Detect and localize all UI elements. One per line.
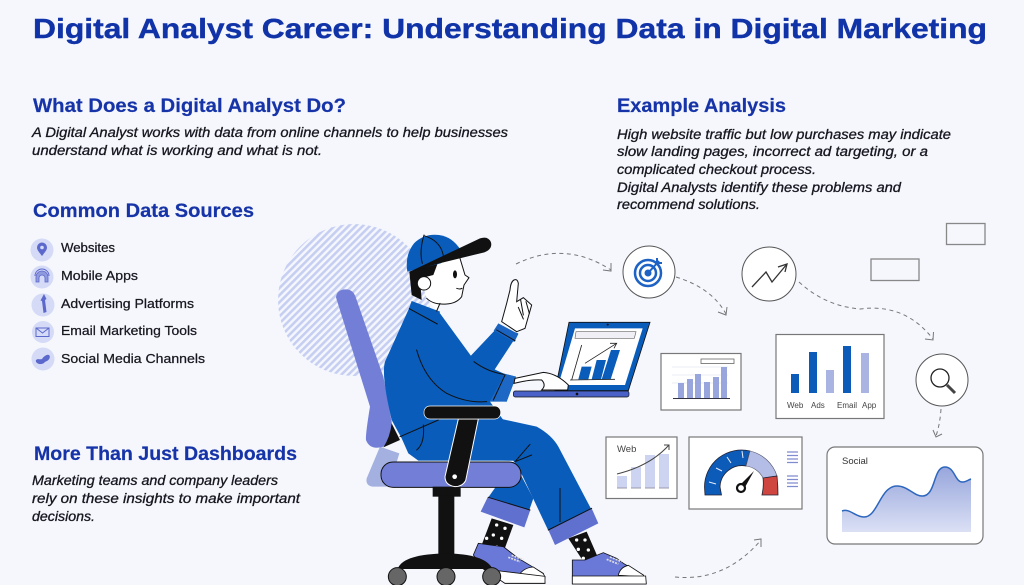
panel: example analysis <box>617 96 951 212</box>
chart: social area panel <box>827 447 983 544</box>
chart: web ads email app bars: Web <box>787 401 804 410</box>
empty box: upper right <box>946 224 985 244</box>
icon: social media channels <box>32 348 54 370</box>
chart: web ads email app bars <box>776 334 884 418</box>
text block: insights description: Marketing teams and company leaders <box>32 473 278 488</box>
panel: common data sources <box>30 201 254 370</box>
text block: role description: A Digital Analyst works with data from online channels to help businesses <box>31 125 508 140</box>
icon: trend line <box>742 247 796 301</box>
text block: role description <box>31 125 508 158</box>
text block: example description <box>617 127 951 212</box>
socks and shoes <box>473 518 646 584</box>
text block: example description: High website traffic but low purchases may indicate <box>617 127 951 142</box>
armrest <box>424 406 501 487</box>
chart: web ads email app bars: Email <box>837 401 857 410</box>
chart: web growth panel <box>606 437 677 498</box>
chair back <box>336 289 400 487</box>
text block: example description: complicated checkout process. <box>617 162 816 177</box>
icon: email marketing tools <box>32 321 54 343</box>
laptop <box>513 322 650 397</box>
head and cap <box>407 235 491 311</box>
arrow: to target <box>516 253 611 271</box>
icon: mobile apps <box>30 266 54 288</box>
heading: more than just dashboards: More Than Just Dashboards <box>34 444 297 465</box>
chart: gauge panel <box>689 437 802 509</box>
seat <box>381 462 521 487</box>
text block: insights description <box>32 473 301 524</box>
heading: common data sources: Common Data Sources <box>33 201 254 222</box>
heading: what does a digital analyst do: What Does a Digital Analyst Do? <box>33 96 346 117</box>
arrow: target to chart <box>676 277 727 315</box>
label: advertising platforms: Advertising Platforms <box>61 296 195 311</box>
icon: magnifying glass <box>916 354 968 406</box>
label: websites: Websites <box>61 240 115 255</box>
background hatched circle <box>278 224 430 376</box>
arrow: trend to search <box>799 282 934 340</box>
label: mobile apps: Mobile Apps <box>61 268 139 283</box>
trousers <box>403 415 598 545</box>
empty box: middle right <box>871 259 919 280</box>
chart: web growth panel: Web <box>617 444 636 455</box>
torso and arms <box>384 301 518 461</box>
text block: example description: Digital Analysts identify these problems and <box>617 180 902 195</box>
text block: example description: recommend solutions. <box>617 197 760 212</box>
panel: more than just dashboards <box>32 444 301 524</box>
label: email marketing tools: Email Marketing Tools <box>61 323 198 338</box>
title: Digital Analyst Career: Understanding Data in Digital Marketing <box>33 13 987 44</box>
chair column and base <box>388 487 501 585</box>
icon: websites location pin <box>30 238 54 262</box>
arrow: bottom curve <box>675 539 761 578</box>
chart: web ads email app bars: Ads <box>811 401 825 410</box>
icon: target <box>623 246 675 298</box>
chart: social area panel: Social <box>842 456 868 467</box>
raised hand <box>502 280 532 332</box>
chart: web ads email app bars: App <box>862 401 877 410</box>
text block: insights description: rely on these insights to make important <box>32 491 301 506</box>
text block: example description: slow landing pages, incorrect ad targeting, or a <box>617 144 929 159</box>
arrow: search to social <box>933 409 942 437</box>
heading: example analysis: Example Analysis <box>617 96 786 117</box>
illustration: analyst seated in chair with laptop <box>336 235 650 585</box>
panel: what does a digital analyst do <box>31 96 508 158</box>
typing hand <box>514 372 568 390</box>
label: social media channels: Social Media Channels <box>61 351 206 366</box>
text block: insights description: decisions. <box>32 509 95 524</box>
icon: advertising platforms <box>32 294 54 316</box>
chart: small bar chart panel <box>661 354 741 410</box>
text block: role description: understand what is working and what is not. <box>32 143 322 158</box>
